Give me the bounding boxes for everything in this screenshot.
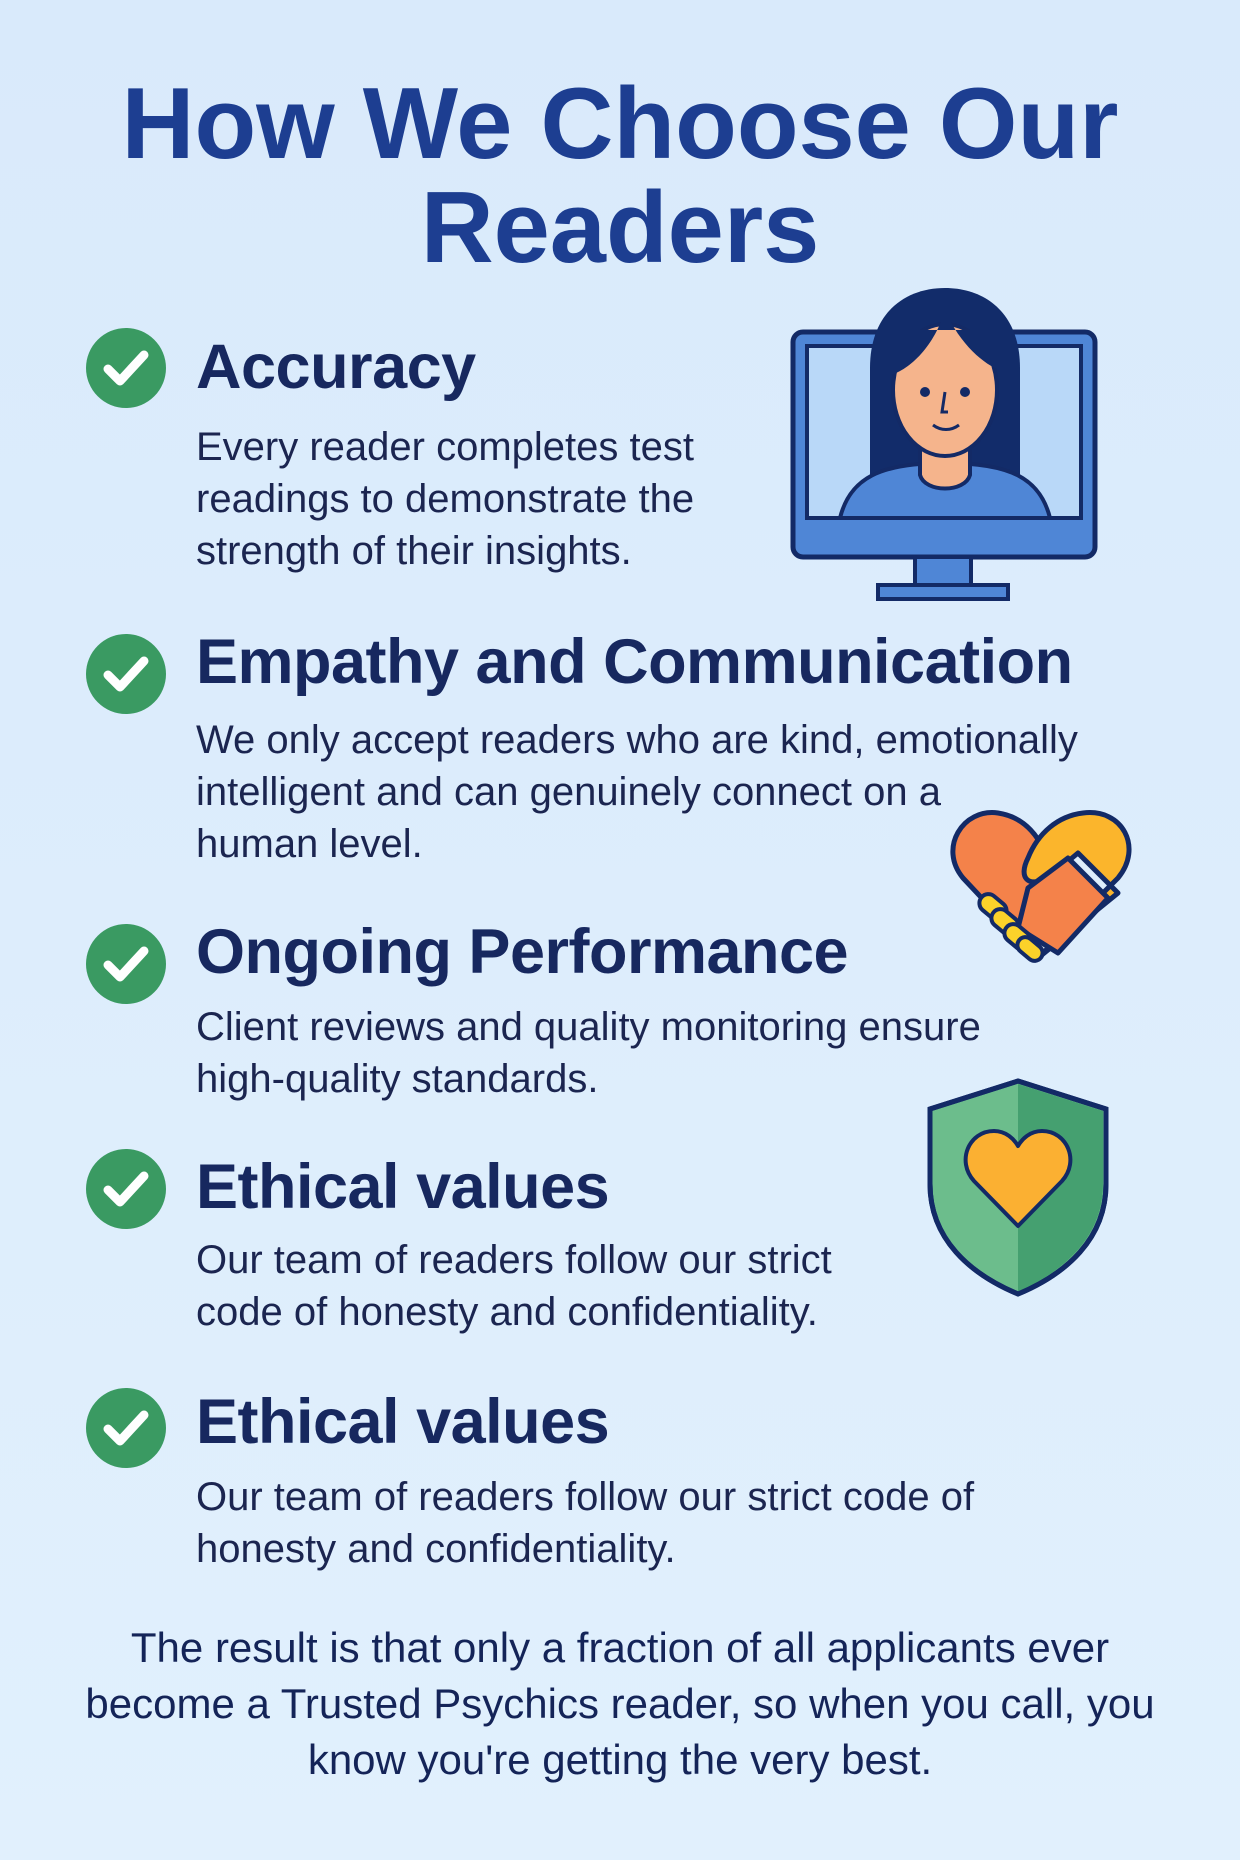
footer text: The result is that only a fraction of all applicants ever xyxy=(131,1624,1109,1671)
icon: check 1 xyxy=(86,328,166,408)
text: ethical 1 xyxy=(196,1238,832,1334)
icon: monitor with reader xyxy=(790,288,1098,601)
text: accuracy xyxy=(196,425,694,573)
text: empathy: We only accept readers who are kind, emotionally xyxy=(196,718,1078,762)
heading: empathy: Empathy and Communication xyxy=(196,627,1073,697)
text: ethical 1: code of honesty and confidentiality. xyxy=(196,1290,818,1334)
text: ethical 2: Our team of readers follow our strict code of xyxy=(196,1475,974,1519)
heading: ongoing: Ongoing Performance xyxy=(196,917,848,987)
text: empathy: human level. xyxy=(196,822,423,866)
text: empathy: intelligent and can genuinely connect on a xyxy=(196,770,941,814)
icon: check 2 xyxy=(86,634,166,714)
icon: handshake heart xyxy=(950,810,1132,963)
title xyxy=(122,68,1118,284)
icon: check 5 xyxy=(86,1388,166,1468)
footer text xyxy=(85,1624,1155,1783)
icon: check 4 xyxy=(86,1149,166,1229)
heading: accuracy: Accuracy xyxy=(196,332,476,402)
heading: ethical values 1: Ethical values xyxy=(196,1152,609,1222)
text: accuracy: Every reader completes test xyxy=(196,425,694,469)
text: ethical 2: honesty and confidentiality. xyxy=(196,1527,676,1571)
text: ongoing: high-quality standards. xyxy=(196,1057,598,1101)
text: ethical 1: Our team of readers follow our strict xyxy=(196,1238,832,1282)
text: ongoing: Client reviews and quality monitoring ensure xyxy=(196,1005,981,1049)
title: Readers xyxy=(421,172,819,284)
title: How We Choose Our xyxy=(122,68,1118,180)
text: ethical 2 xyxy=(196,1475,974,1571)
icon: shield heart xyxy=(928,1078,1108,1297)
footer text: become a Trusted Psychics reader, so when you call, you xyxy=(85,1680,1155,1727)
heading: ethical values 2: Ethical values xyxy=(196,1387,609,1457)
text: ongoing xyxy=(196,1005,981,1101)
footer text: know you're getting the very best. xyxy=(308,1736,932,1783)
text: accuracy: readings to demonstrate the xyxy=(196,477,694,521)
text: empathy xyxy=(196,718,1078,866)
text: accuracy: strength of their insights. xyxy=(196,529,632,573)
icon: check 3 xyxy=(86,924,166,1004)
